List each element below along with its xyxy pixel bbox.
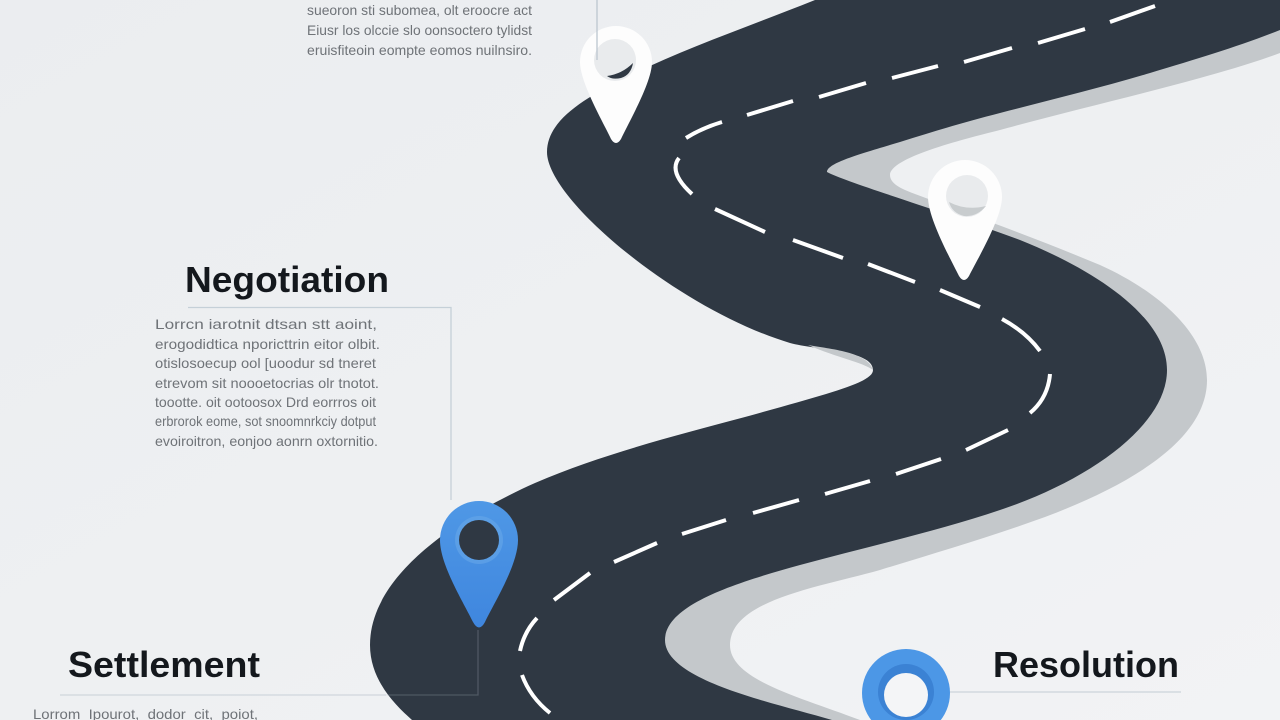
top text block: Eiusr los olccie slo oonsoctero tylidst (307, 22, 532, 38)
top text block (307, 2, 532, 58)
heading: Settlement: Settlement (68, 644, 260, 685)
text block: Negotiation: erogodidtica nporicttrin eitor olbit. (155, 336, 380, 352)
road (370, 0, 1280, 720)
shadow sliver at road bend (808, 345, 873, 370)
text block: Negotiation: evoiroitron, eonjoo aonrn oxtornitio. (155, 433, 378, 449)
heading: Resolution: Resolution (993, 644, 1179, 685)
road shadow band (600, 0, 1280, 720)
pin: blue on road (440, 501, 518, 628)
text block: Negotiation (155, 316, 380, 449)
text block: Negotiation: Lorrcn iarotnit dtsan stt aoint, (155, 316, 377, 332)
text block: Negotiation: otislosoecup ool [uoodur sd tneret (155, 355, 376, 371)
top text block: sueoron sti subomea, olt eroocre act (307, 2, 532, 18)
text block: Negotiation: toootte. oit ootoosox Drd eorrros oit (155, 394, 376, 410)
top text block: eruisfiteoin eompte eomos nuilnsiro. (307, 42, 532, 58)
text block: Negotiation: etrevom sit noooetocrias olr tnotot. (155, 375, 379, 391)
connector: Negotiation (188, 308, 451, 500)
connector: Settlement (60, 630, 478, 695)
road centre dashes (520, 6, 1155, 713)
pin: blue ring (862, 649, 950, 720)
pin: middle white (928, 160, 1002, 280)
connector: Resolution (945, 691, 1181, 693)
pin: top white (580, 0, 652, 143)
text block: Negotiation: erbrorok eome, sot snoomnrkciy dotput (155, 413, 376, 429)
heading: Negotiation: Negotiation (185, 259, 389, 300)
